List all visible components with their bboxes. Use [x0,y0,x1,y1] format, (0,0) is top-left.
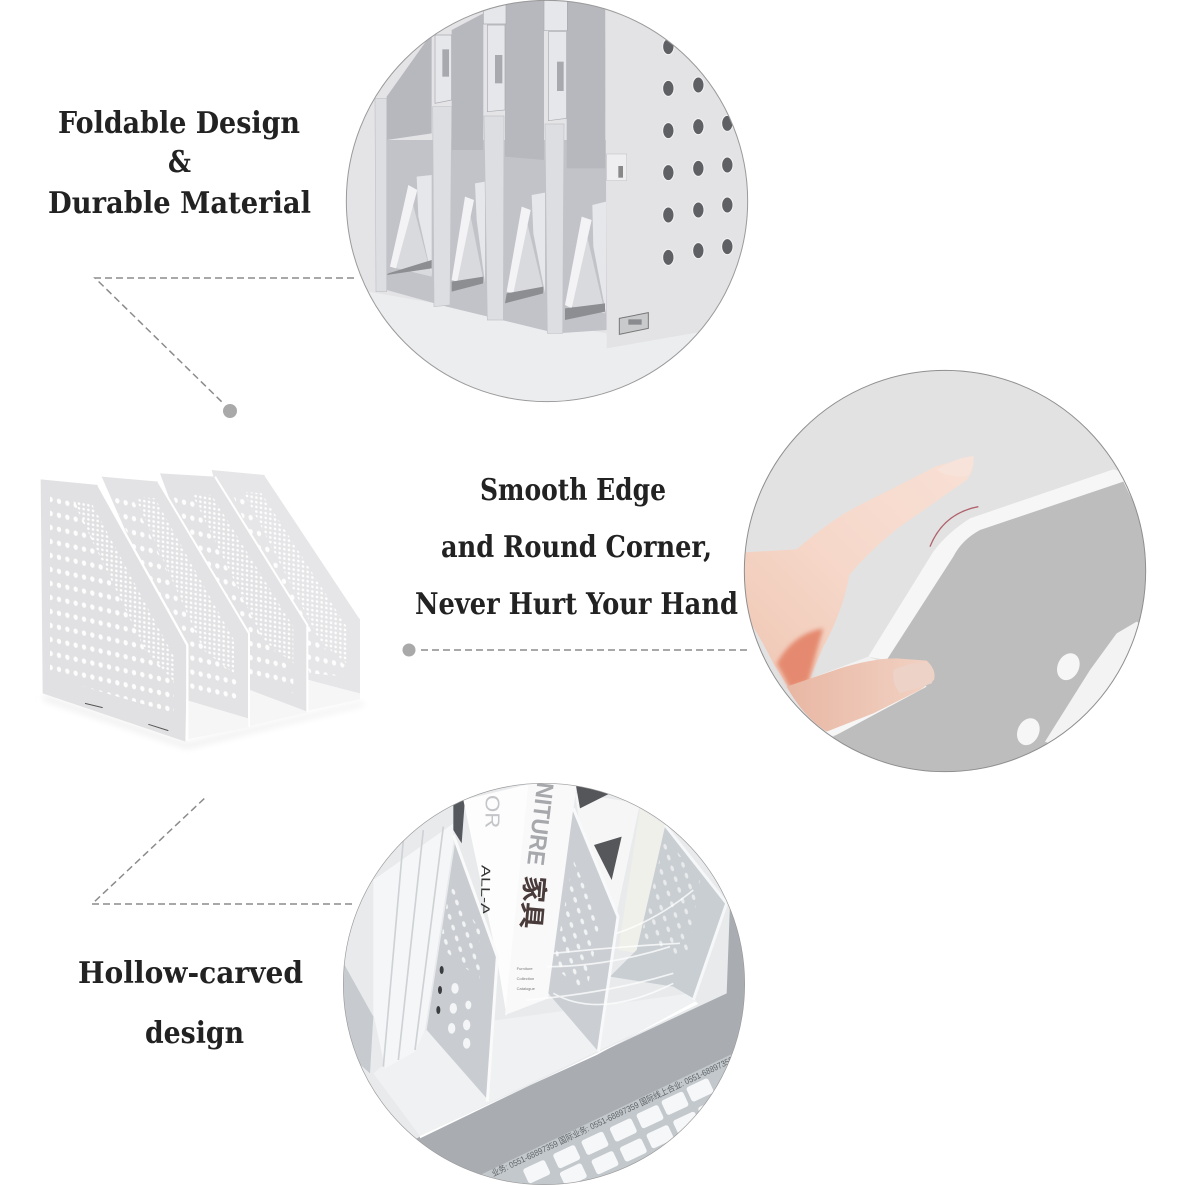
side panel lock [619,313,648,334]
heading: hollow-carved design: Hollow-carved [78,956,303,991]
furniture magazine: 家具 [513,874,557,931]
keyboard ruler with text: 业务: 0551-68897359 国际业务: 0551-68897359 国际线上合业: 0551-68897359 [489,1054,735,1178]
circle outline [346,0,748,402]
heading: smooth edge and round corner: and Round Corner, [441,530,712,565]
right divider panel [610,825,727,1000]
circle outline [343,783,745,1185]
hinge slots [442,49,564,91]
index fingernail [952,456,972,462]
front divider [41,479,187,742]
furniture magazine: Furniture [517,966,533,971]
left panel [344,965,374,1074]
heading: foldable design and durable material: Foldable Design [58,106,300,141]
dark gap behind books [453,798,465,843]
photo circle: foldable hinges [340,0,750,410]
upright posts [375,98,564,333]
recessed lower panels [387,140,607,333]
rounded corner arc [930,507,978,547]
photo circle: finger on rounded edge [740,370,1150,780]
upper hinge strips [435,0,567,121]
panel inner stripe [1045,622,1138,743]
heading: foldable design and durable material [48,106,311,221]
heading: smooth edge and round corner: Smooth Edge [480,473,666,508]
panel holes [1013,649,1084,749]
front side panel [605,10,706,348]
base tray [373,993,698,1136]
circle outline [744,370,1146,772]
white panel edge [820,469,1150,737]
folded supports [387,175,606,320]
floor shadow [43,695,363,748]
heading: smooth edge and round corner [415,473,738,622]
rear divider [212,470,360,695]
book stack right [618,808,665,953]
heading: foldable design and durable material: & [168,145,191,180]
front tray lip [420,1002,698,1138]
hand: palm and index finger [740,456,974,690]
second divider [102,477,249,739]
heading: hollow-carved design: design [145,1016,244,1051]
white edge by thumb [819,656,876,676]
grey panel face [833,482,1150,780]
third divider [160,473,307,712]
furniture magazine [505,780,577,1015]
airflow streaks [527,890,693,1005]
product photo: white folding file holder [41,470,363,748]
hand: thumb [787,658,935,732]
white book with text: ALL-A [478,865,493,916]
heading: hollow-carved design [78,956,303,1051]
background [746,371,1118,737]
background wall and floor [346,12,698,401]
connector: smooth edge callout to product [402,644,751,656]
ventilation holes [663,39,733,265]
white book with text [463,783,532,1017]
heading: foldable design and durable material: Durable Material [48,186,311,221]
white binders on left [373,823,453,1068]
connector: hollow-carved callout to product [92,796,352,904]
hand: shaded fold [777,628,823,688]
open magazine with photo [575,780,640,913]
side panel clip [607,154,627,181]
rear grey panels [387,0,605,168]
furniture magazine: NITURE [521,781,558,867]
center divider panel [548,808,618,1052]
left divider panel [427,835,497,1102]
furniture magazine: Collection [517,976,534,981]
connector: foldable callout to product [95,278,354,418]
furniture magazine: Catalogue [517,986,536,991]
thumbnail [893,663,934,693]
background and desk [340,780,750,1185]
white book with text: OR [481,795,503,828]
floor plates [250,680,360,726]
heading: smooth edge and round corner: Never Hurt Your Hand [415,587,738,622]
keyboard keys [522,1078,726,1185]
photo circle: hollow-carved panels with magazines [340,780,750,1185]
